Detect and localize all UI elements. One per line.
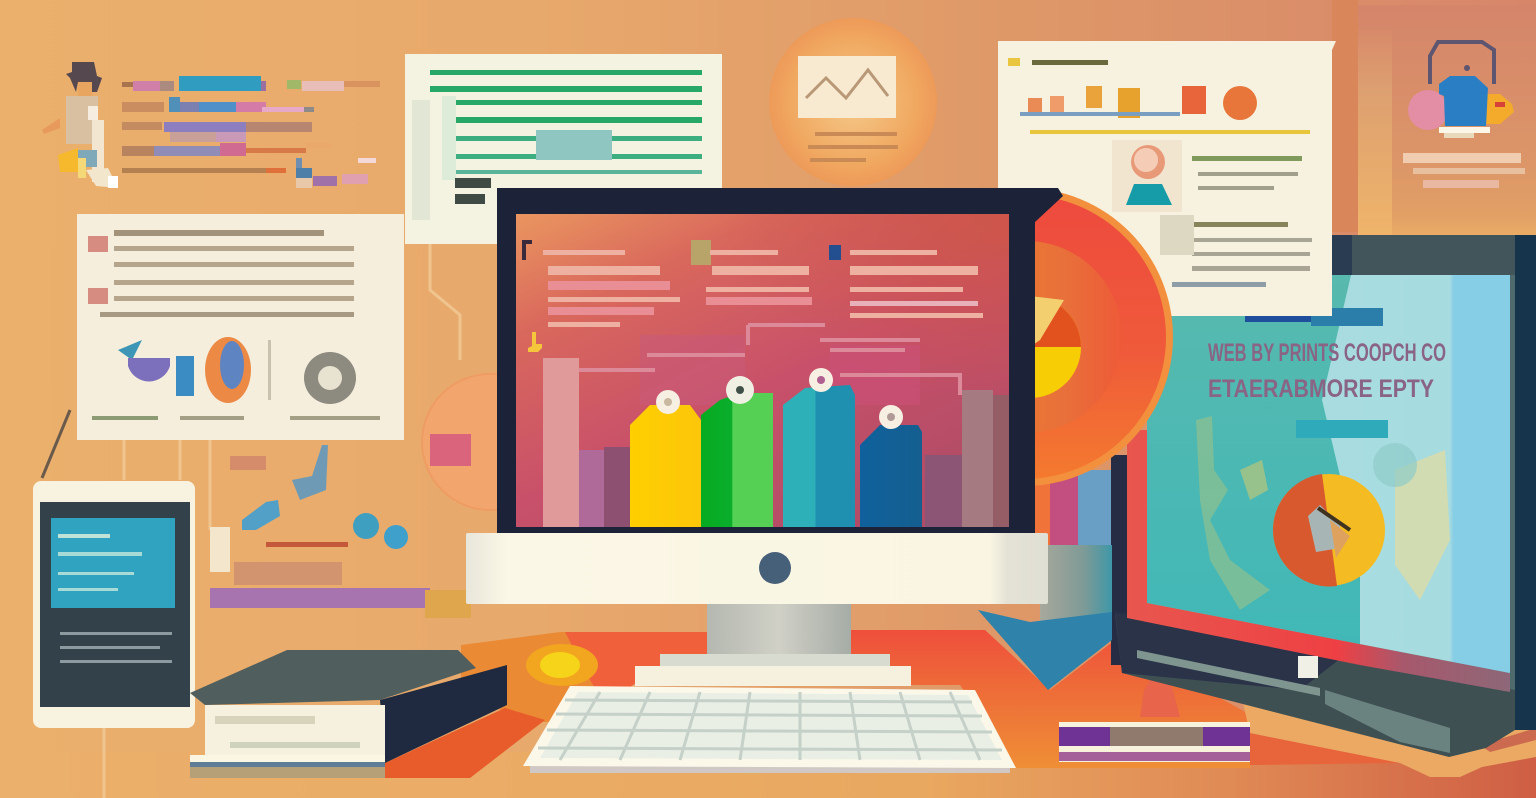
monitor bezel [497,188,1063,538]
icon: blue kettle [1403,42,1525,188]
panel: left text document with icons [77,214,404,440]
icon: keyboard [523,686,1016,773]
panel: green table document [405,54,722,244]
panel: gray block and blue box [978,545,1112,690]
bar chart [630,368,922,527]
screen text columns [522,240,983,352]
faded background bars [543,325,1009,527]
panel: circle callout with small chart [769,18,937,186]
icon: person portrait [1112,140,1182,212]
panel: right top tinted sheet [1332,0,1536,235]
panel: main monitor [466,188,1063,686]
pie chart [1273,474,1385,587]
screen [1147,275,1510,673]
panel: desk surface [385,630,1536,778]
heading: monitor title [1208,339,1446,403]
monitor badge [1298,656,1318,678]
panel: large orange sunburst [875,188,1173,486]
monitor stand [635,600,911,686]
monitor logo button [759,552,791,584]
bar markers [656,368,903,429]
panel: top-left text rows with figure [42,62,380,188]
icon: book stack [190,650,507,778]
panel: side circle behind monitor [422,374,558,510]
monitor chin [466,533,1048,604]
red edge [1127,430,1510,692]
icon: standing figure [42,62,118,188]
heading: monitor title: ETAERABMORE EPTY [1208,375,1434,403]
monitor body [1510,235,1536,730]
map blobs [1196,416,1450,610]
panel: strips below sunburst [1034,470,1111,600]
lower bezel [1115,615,1515,757]
connector lines [42,244,460,798]
panel: lower-left analytics scraps [210,445,471,618]
panel: article sheet upper right [998,41,1383,326]
panel: tablet [33,481,195,728]
monitor screen [516,214,1009,527]
text rows [122,76,380,188]
icon: yellow lamp glow [526,644,598,686]
icon: purple notebook [1059,722,1250,762]
panel: right monitor [1111,235,1536,757]
